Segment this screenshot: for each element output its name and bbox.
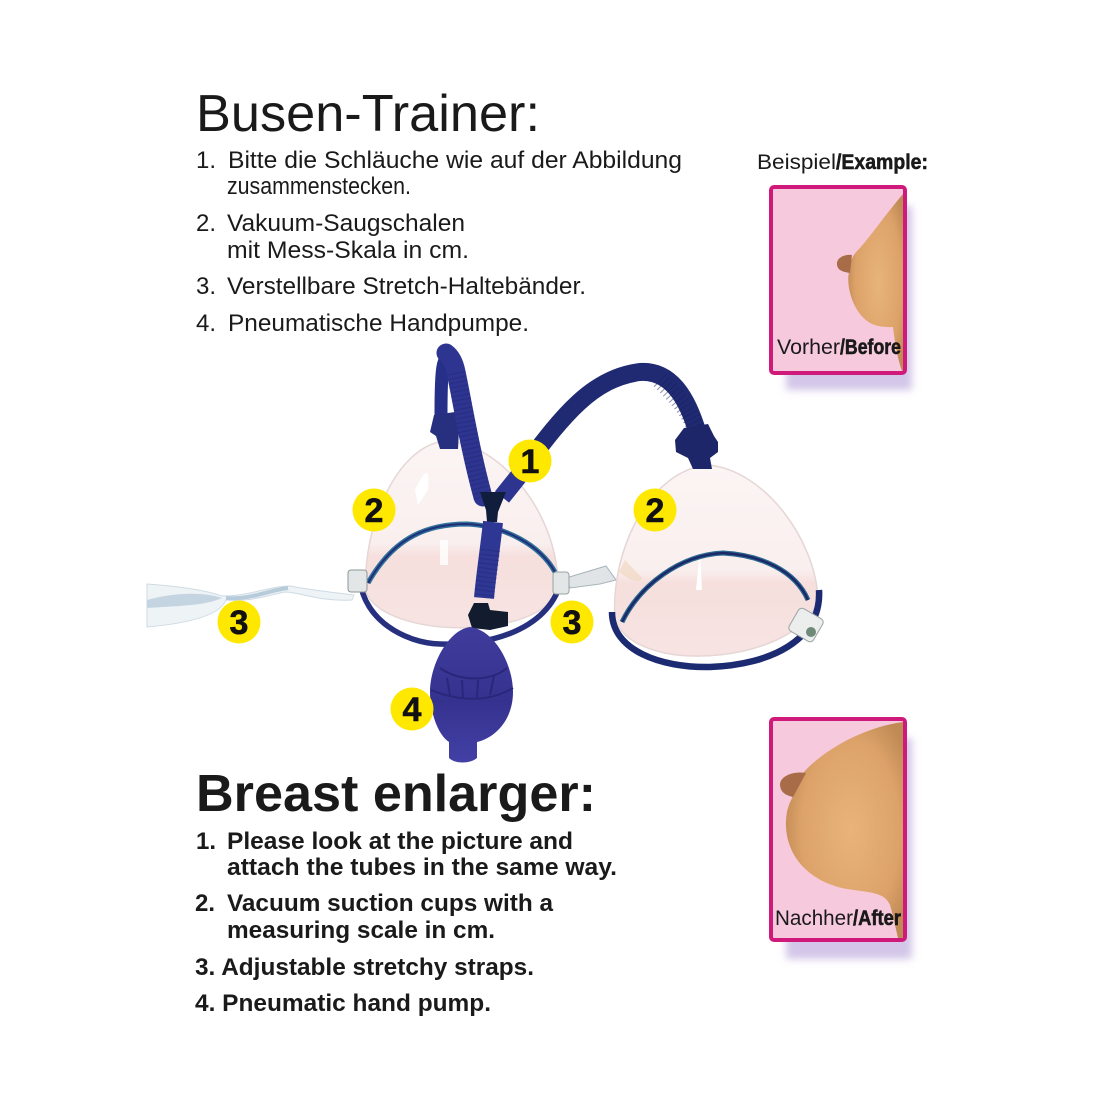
callout 3 left: [218, 600, 260, 644]
German instruction list: mit Mess-Skala in cm.: [227, 237, 469, 264]
icon: after shape: [786, 722, 903, 938]
English instruction list: [195, 828, 617, 1017]
callout 1: 1: [521, 443, 539, 481]
callout 2 right: 2: [646, 492, 664, 530]
strap between cups: [566, 566, 616, 588]
callout 4: 4: [403, 691, 422, 729]
strap left: [147, 584, 354, 627]
English instruction list: Please look at the picture and: [227, 828, 573, 855]
left cup: [360, 441, 562, 644]
right connector: [675, 424, 718, 469]
English instruction list: Vacuum suction cups with a: [227, 890, 554, 917]
left connector: [430, 412, 459, 449]
English instruction list: measuring scale in cm.: [227, 917, 495, 944]
English instruction list: 2.: [195, 890, 215, 917]
lower tube: [484, 522, 493, 598]
German instruction list: Pneumatische Handpumpe.: [228, 310, 529, 337]
panel: after: [771, 719, 912, 959]
example label: /Example:: [836, 151, 928, 174]
German instruction list: [196, 147, 682, 337]
metal clips: [348, 570, 825, 643]
English instruction list: attach the tubes in the same way.: [227, 854, 617, 881]
front tube: [446, 353, 483, 497]
English instruction list: 1.: [196, 828, 216, 855]
right tube: [522, 372, 698, 470]
panel: after: /After: [853, 907, 901, 930]
example label: [757, 151, 928, 174]
German instruction list: 3.: [196, 273, 216, 300]
German instruction list: Vakuum-Saugschalen: [227, 210, 465, 237]
panel: after: Nachher: [775, 907, 853, 930]
hand pump: [430, 627, 513, 762]
Y joint: [480, 492, 506, 522]
English instruction list: 3. Adjustable stretchy straps.: [195, 954, 534, 981]
English instruction list: 4. Pneumatic hand pump.: [195, 990, 491, 1017]
tubes: [430, 353, 718, 630]
right cup: [612, 465, 819, 667]
panel: before: [771, 187, 912, 390]
callout 3 right: [550, 600, 594, 644]
right tube short section: [502, 462, 530, 497]
panel: before: Vorher: [777, 336, 840, 359]
German instruction list: 1.: [196, 147, 216, 174]
callout 3 left: 3: [230, 604, 248, 642]
example label: Beispiel: [757, 151, 836, 174]
German instruction list: Verstellbare Stretch-Haltebänder.: [227, 273, 586, 300]
icon: before shape: [848, 194, 903, 371]
callout 2 right: [634, 488, 676, 532]
callout 2 left: [352, 488, 396, 532]
callout 2 left: 2: [365, 492, 383, 530]
German instruction list: 4.: [196, 310, 216, 337]
pump connector: [468, 603, 508, 630]
back tube: [441, 357, 452, 415]
callout 1: [508, 440, 552, 482]
callout 4: [390, 688, 434, 730]
German instruction list: zusammenstecken.: [227, 173, 411, 200]
German instruction list: 2.: [196, 210, 216, 237]
callout 3 right: 3: [563, 604, 581, 642]
title: Breast enlarger: Breast enlarger:: [196, 765, 596, 823]
panel: before: /Before: [840, 336, 901, 359]
German instruction list: Bitte die Schläuche wie auf der Abbildung: [228, 147, 682, 174]
product illustration: [147, 353, 825, 762]
title: Busen-Trainer: Busen-Trainer:: [196, 85, 540, 143]
